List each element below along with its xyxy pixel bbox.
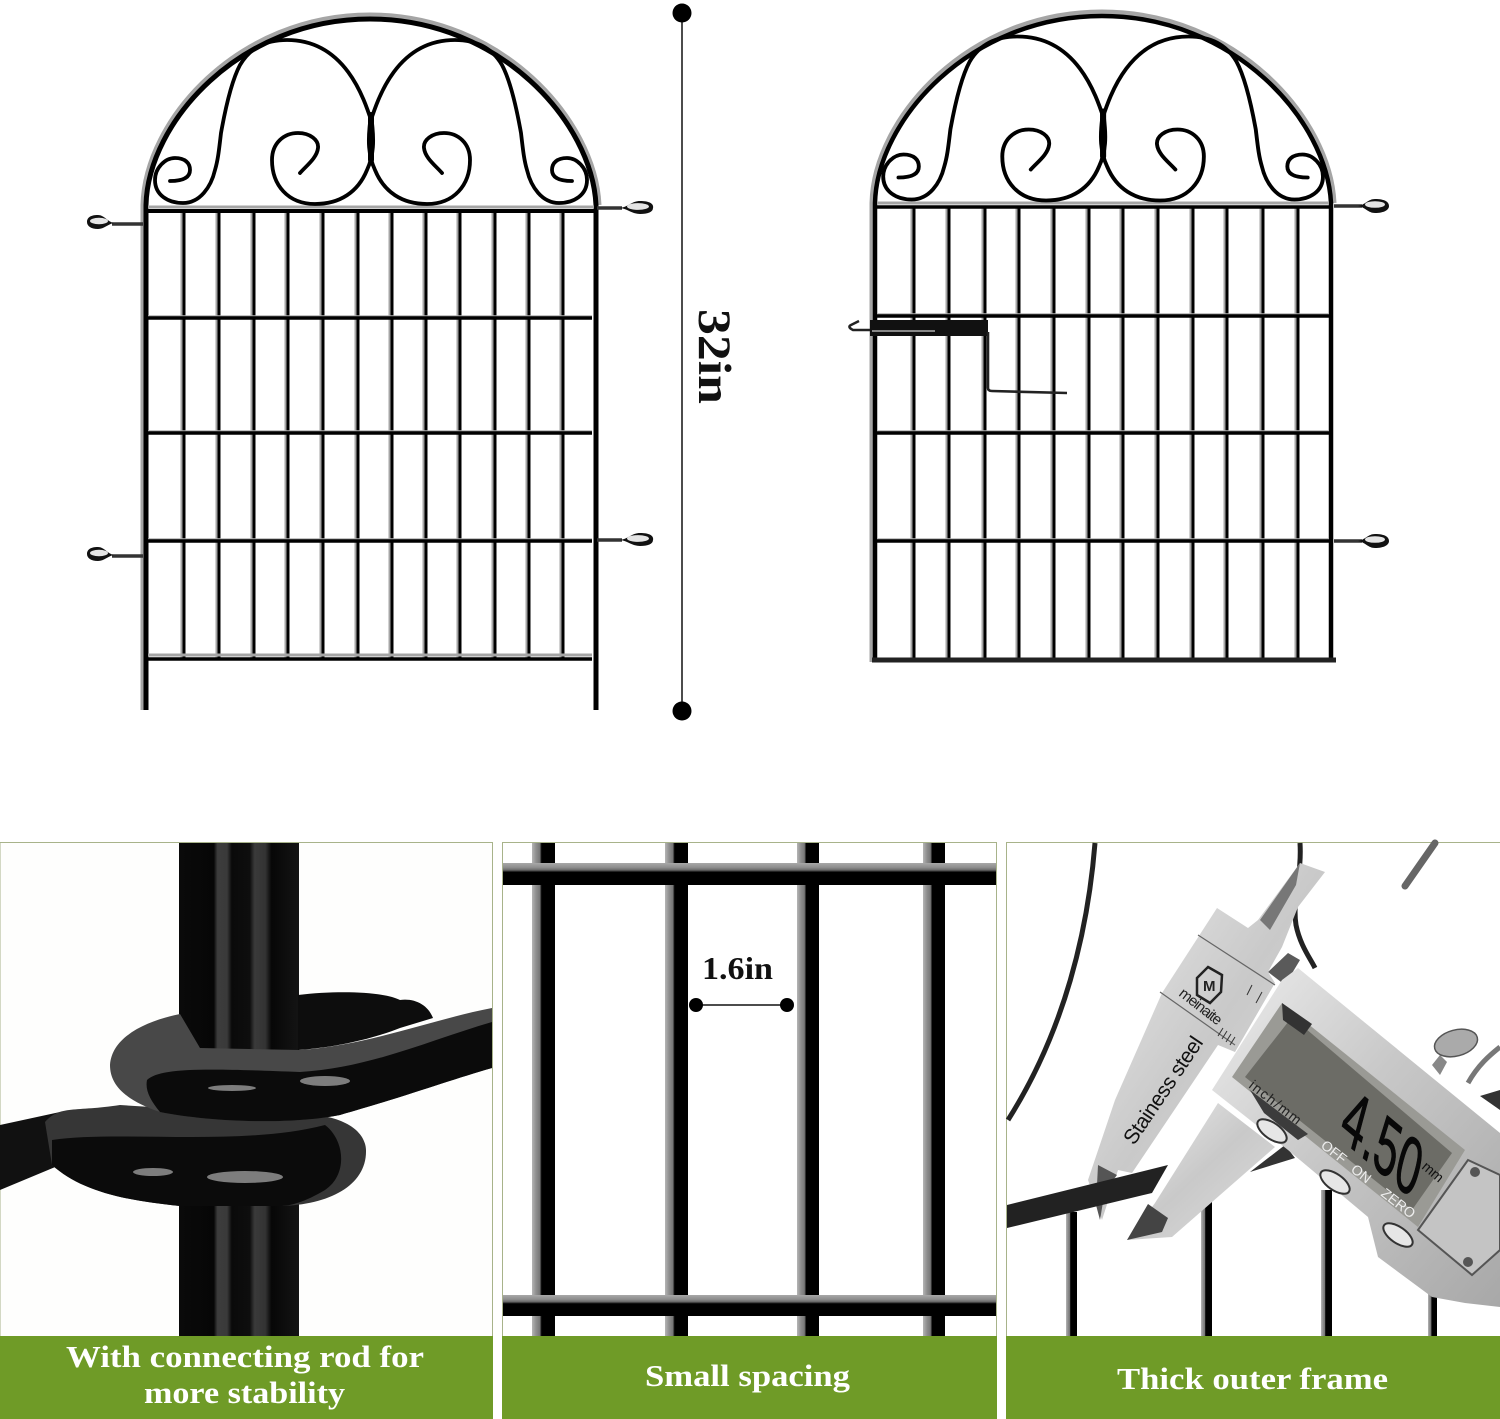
caption: connecting rod: more stability (144, 1375, 346, 1410)
caption: small spacing (502, 1336, 997, 1419)
height dimension (672, 4, 740, 720)
display unit: mm (1419, 1158, 1447, 1185)
lower jaw tip (1127, 1204, 1168, 1240)
button labels: OFF (1318, 1137, 1350, 1167)
wire behind body (1250, 1145, 1295, 1172)
gate decorative scrolls (883, 36, 1323, 200)
panel background (502, 842, 996, 1336)
body thumb wheel (1431, 1025, 1481, 1075)
display frame (1232, 1003, 1465, 1227)
jaw dark sliver (1260, 863, 1300, 930)
jaw tip (1096, 1165, 1117, 1220)
body dark clamp (1480, 1090, 1500, 1110)
textured rod behind body (1268, 953, 1300, 985)
beam groove (1160, 935, 1275, 1045)
button labels: ON (1348, 1161, 1375, 1186)
vertical rod (179, 843, 299, 1336)
button labels: ZERO (1378, 1185, 1419, 1221)
spacing marker (689, 998, 794, 1012)
wire through jaws (1007, 1165, 1168, 1228)
button labels (1246, 1077, 1419, 1221)
decorative scrolls (155, 40, 587, 204)
brand logo: M (1203, 978, 1216, 995)
caption: connecting rod (0, 1336, 493, 1419)
panel background (1006, 842, 1500, 1336)
caption: thick outer frame (1006, 1336, 1500, 1419)
gate panel: right (849, 12, 1389, 662)
gate eyelets (1334, 199, 1389, 548)
spacing label: 1.6in (702, 950, 773, 986)
display reading: 4.50 (1334, 1069, 1431, 1216)
gate vertical bars (912, 208, 1298, 658)
display lower dark band (1250, 1090, 1308, 1140)
height label: 32in (688, 309, 740, 404)
upper rod wrap (110, 1008, 492, 1121)
lower rod wrap (45, 1105, 366, 1206)
curved wires (1008, 843, 1500, 1120)
button labels: inch/mm (1246, 1077, 1305, 1128)
panel background (0, 842, 492, 1336)
caption: thick outer frame: Thick outer frame (1117, 1361, 1388, 1396)
caption: connecting rod: With connecting rod for (66, 1339, 424, 1374)
caliper buttons (1253, 1115, 1417, 1251)
caption: small spacing: Small spacing (645, 1358, 851, 1393)
vertical wires (532, 843, 945, 1336)
photo panel: connecting rod (0, 842, 492, 1336)
photo panel: thick outer frame (1006, 842, 1500, 1336)
display dark corner (1282, 1003, 1312, 1035)
gate horizontal bars (872, 203, 1336, 660)
rod tail over loop (298, 992, 433, 1050)
connecting eyelets (87, 201, 653, 561)
gloss highlights (133, 1076, 350, 1183)
vertical bars (182, 212, 563, 658)
battery cover (1418, 1160, 1500, 1275)
scale ticks (1218, 985, 1262, 1045)
brand name: meinaite (1176, 985, 1225, 1029)
left wire stub (0, 1112, 60, 1190)
dimension line with end dots (672, 4, 692, 720)
material label: Stainess steel (1119, 1032, 1208, 1149)
horizontal bars (148, 207, 594, 659)
caliper body (1212, 968, 1500, 1307)
photo panel: small spacing (502, 842, 996, 1336)
display LCD (1245, 1017, 1452, 1210)
horizontal wires (503, 863, 996, 1316)
brand logo (1197, 967, 1222, 1003)
caliper lower jaw (1127, 1103, 1275, 1240)
fence panel: left (87, 15, 653, 710)
fence frame with arch (143, 15, 599, 710)
gate frame with arch (872, 12, 1334, 662)
vertical pickets (1066, 1190, 1437, 1336)
caliper upper jaw (1088, 863, 1325, 1220)
gate latch (849, 320, 1067, 393)
